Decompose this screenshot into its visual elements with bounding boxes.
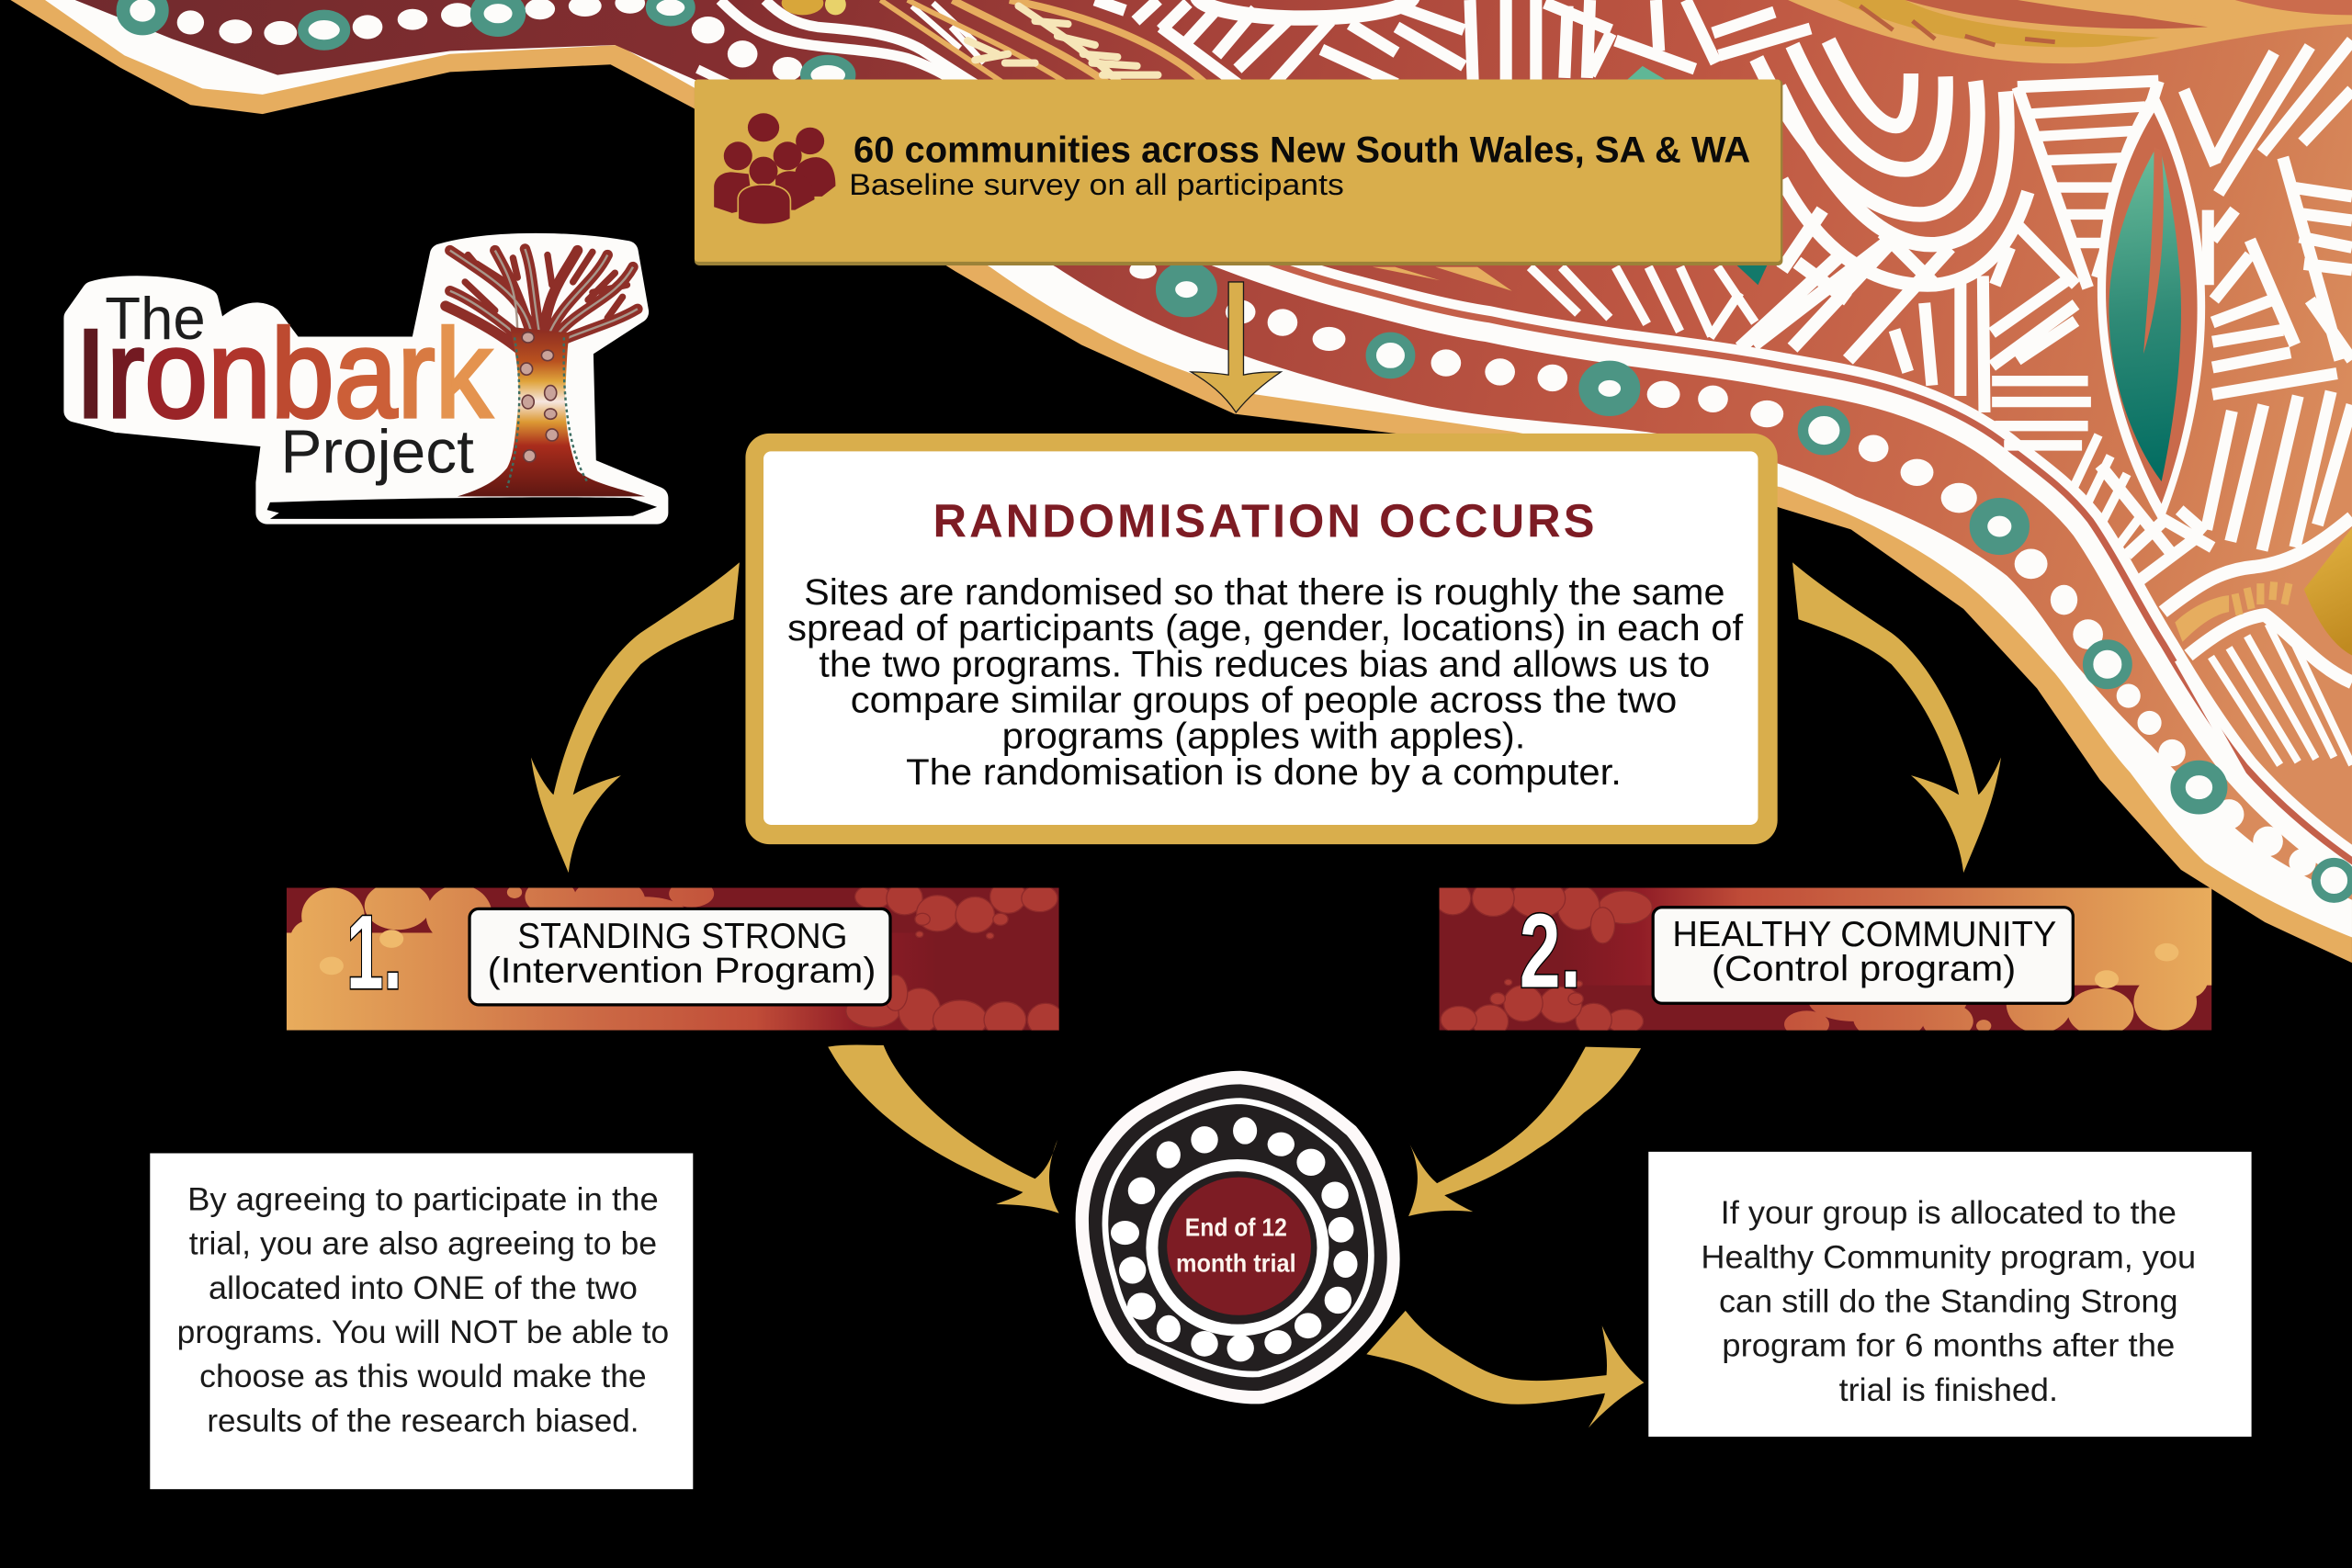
arrow: program 2 to end of trial [1408, 1047, 1641, 1216]
note: agreeing to participate: programs. You will NOT be able to [177, 1314, 669, 1350]
randomisation body text [787, 572, 1744, 793]
note: healthy community follow-up: program for 6 months after the [1722, 1328, 2175, 1364]
header title: 60 communities across New South Wales, SA & WA [854, 130, 1750, 170]
label: standing strong [469, 908, 890, 1005]
double line above dotted band [1140, 218, 2352, 867]
randomisation body text: programs (apples with apples). [1002, 716, 1525, 757]
label: standing strong: (Intervention Program) [488, 951, 876, 990]
arrow: randomisation to program 1 [531, 562, 740, 873]
arrow: header to randomisation [1191, 282, 1281, 412]
tan wedges below header [1373, 267, 1512, 291]
note: healthy community follow-up: If your group is allocated to the [1721, 1195, 2177, 1231]
dotted band: teal rings [123, 0, 2352, 898]
number 1: 1. [346, 895, 402, 1011]
label: healthy community: HEALTHY COMMUNITY [1672, 915, 2056, 954]
note: healthy community follow-up [1648, 1152, 2252, 1437]
note: agreeing to participate: trial, you are also agreeing to be [189, 1226, 657, 1262]
logo: The Ironbark Project: Ironbark [75, 304, 492, 445]
label: healthy community [1653, 908, 2073, 1003]
logo: The Ironbark Project [75, 244, 657, 519]
note: agreeing to participate [150, 1153, 693, 1489]
lower right curves [2163, 517, 2352, 612]
diagonal hatch below U curves [1740, 210, 1950, 360]
circle: end of 12 month trial: month trial [1176, 1248, 1296, 1277]
banner: program 1 standing strong [287, 887, 1059, 1031]
label: healthy community: (Control program) [1712, 950, 2016, 989]
circle text: End of 12 [1185, 1213, 1287, 1241]
arrow: program 1 to end of trial [828, 1045, 1059, 1213]
banner: program 2 healthy community [1439, 887, 2212, 1031]
note: agreeing to participate: By agreeing to participate in the [187, 1182, 659, 1218]
note: healthy community follow-up: Healthy Community program, you [1701, 1239, 2196, 1275]
header panel: communities [695, 80, 1782, 265]
icon: ironbark tree [267, 249, 657, 519]
circle: end of 12 month trial [1076, 1071, 1400, 1404]
tan feather strokes top centre [880, 0, 1206, 84]
number 2: 2. [1520, 893, 1581, 1010]
randomisation body text: The randomisation is done by a computer. [906, 752, 1622, 793]
randomisation body text: compare similar groups of people across the two [851, 680, 1677, 720]
note: agreeing to participate: results of the research biased. [207, 1403, 639, 1438]
icon: group of people [714, 113, 835, 224]
arrow: randomisation to program 2 [1792, 562, 2001, 873]
arrow: end of trial to follow-up note [1366, 1311, 1644, 1427]
decorative painted band artwork [10, 0, 2352, 963]
note: agreeing to participate: allocated into ONE of the two [209, 1270, 638, 1306]
leaf motif [2098, 87, 2205, 525]
gold motif right edge [2175, 528, 2352, 655]
upper verticals [1396, 0, 1811, 84]
hatch to right of leaf [2208, 210, 2337, 394]
top centre curves [720, 0, 960, 84]
logo: The Ironbark Project: Project [280, 417, 474, 486]
header subtitle: Baseline survey on all participants [849, 167, 1344, 201]
randomisation body text: Sites are randomised so that there is roughly the same [804, 572, 1725, 613]
randomisation body text: the two programs. This reduces bias and allows us to [819, 644, 1710, 684]
note: healthy community follow-up: trial is finished. [1839, 1372, 2058, 1408]
dotted band: white dots [177, 0, 2316, 875]
gold and tan plume top right [1788, 0, 2352, 63]
label: standing strong: STANDING STRONG [517, 917, 847, 956]
randomisation body text: spread of participants (age, gender, locations) in each of [787, 608, 1744, 649]
arc at top [1197, 0, 1413, 18]
logo: The Ironbark Project: The [105, 285, 206, 352]
trapezoid horizontal hatch [2018, 81, 2158, 288]
randomisation heading: RANDOMISATION OCCURS [933, 494, 1595, 547]
note: healthy community follow-up: can still do the Standing Strong [1719, 1284, 2178, 1320]
brush stroke ground line [267, 497, 657, 519]
panel: randomisation occurs [745, 434, 1778, 844]
note: agreeing to participate: choose as this would make the [199, 1359, 647, 1394]
U-shaped stripes [1828, 40, 1911, 126]
